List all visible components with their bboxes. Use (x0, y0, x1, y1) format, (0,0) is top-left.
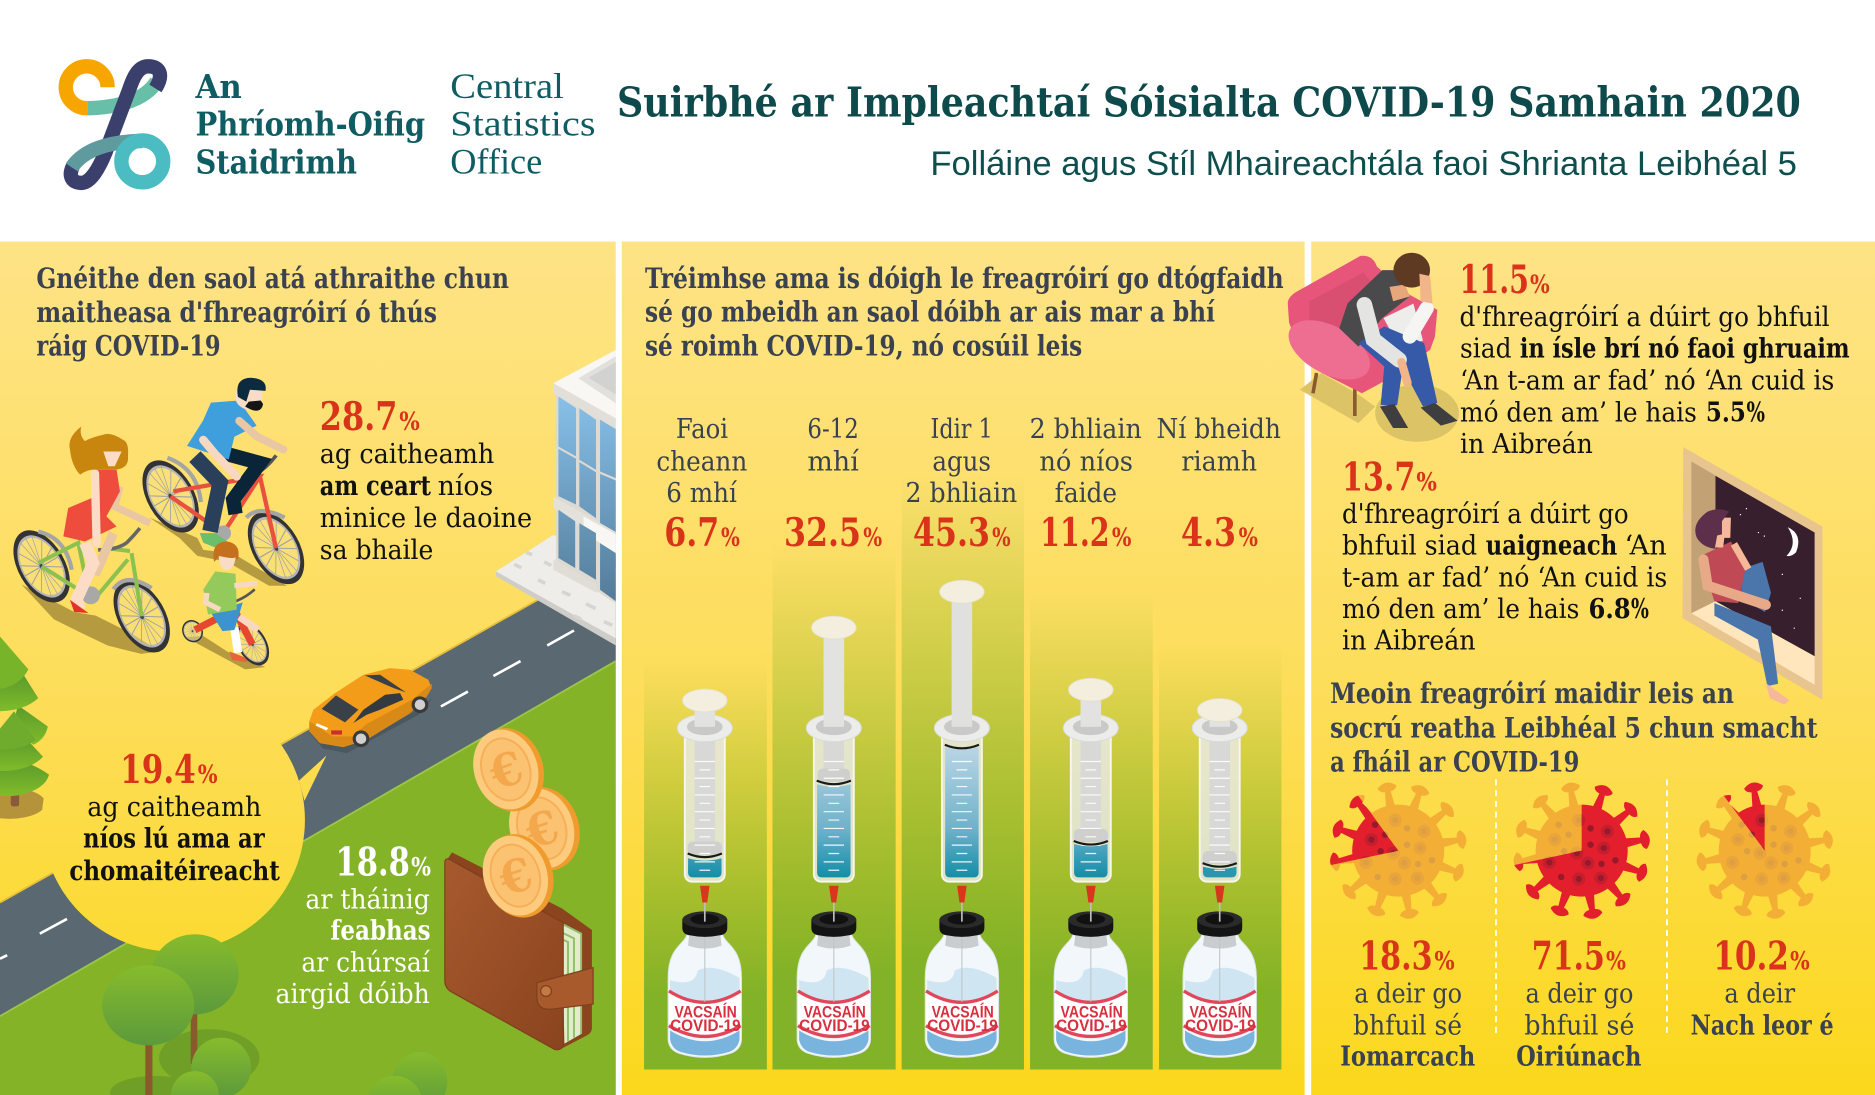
panel heading: aspects of life changed: Gnéithe den saol atá athraithe chun (36, 262, 509, 295)
column: 6-12 months: 6-12 (807, 413, 859, 445)
stat: low or depressed (1459, 257, 1850, 460)
panel: wellbeing (1279, 241, 1875, 1095)
virus pie: 71.5% appropriate: % (1606, 945, 1626, 975)
stat: spending time outdoors: níos (438, 470, 493, 502)
column: never: riamh (1181, 445, 1257, 477)
syringe and vial: 32.5%: COVID-19 (799, 1016, 870, 1035)
column: 2 years or more: % (1112, 522, 1132, 552)
stat: improved finances: ar chúrsaí (301, 946, 430, 978)
illustration: wallet and coins (445, 719, 593, 1050)
illustration: car (309, 668, 433, 753)
coin: front (482, 834, 554, 918)
virus pie: 18.3% too much (1329, 781, 1475, 1073)
column: 6-12 months: % (863, 522, 882, 552)
stat: spending time outdoors: ag caitheamh (320, 438, 494, 470)
stat: improved finances: airgid dóibh (276, 978, 430, 1010)
stat: spending time outdoors: sa bhaile (320, 534, 433, 566)
virus pie: 18.3% too much: 18.3 (1359, 933, 1433, 979)
stat: lonely: 6.8 (1588, 593, 1631, 625)
callout: less time commuting: % (198, 759, 218, 789)
logo mark (66, 66, 163, 183)
logo wordmark English: Statistics (450, 104, 596, 144)
subtitle: Folláine agus Stíl Mhaireachtála faoi Shrianta Leibhéal 5 (930, 145, 1797, 183)
column: 1 to 2 years (905, 413, 1017, 556)
logo wordmark Irish: Staidrimh (196, 143, 357, 181)
column: 1 to 2 years: agus (932, 445, 991, 477)
logo wordmark English: Central (450, 66, 564, 106)
stat: lonely: d'fhreagróirí a dúirt go (1342, 498, 1629, 530)
callout: less time commuting: ag caitheamh (87, 791, 261, 823)
syringe and vial: 32.5% (797, 616, 871, 1057)
callout: less time commuting: 19.4 (120, 747, 196, 793)
illustration: woman at window (1682, 447, 1822, 705)
column: under 6 months: cheann (656, 445, 747, 477)
logo wordmark English: Office (450, 141, 542, 181)
stat: low or depressed: % (1530, 269, 1550, 299)
coin: middle: € (518, 798, 566, 860)
column: 1 to 2 years: Idir 1 (931, 413, 993, 445)
column: 1 to 2 years: 45.3 (913, 510, 990, 556)
column: 1 to 2 years: % (992, 522, 1011, 552)
stat: low or depressed: siad (1460, 332, 1511, 364)
virus pie: 10.2% not enough (1691, 781, 1834, 1042)
column: 1 to 2 years: 2 bhliain (905, 477, 1017, 509)
heading: attitude to Level 5: Meoin freagróirí maidir leis an (1330, 677, 1734, 710)
virus pie: 18.3% too much: Iomarcach (1340, 1041, 1475, 1073)
coin: top: € (482, 740, 530, 801)
syringe and vial: 45.3% (925, 580, 999, 1057)
column: under 6 months: Faoi (676, 413, 728, 445)
stat: lonely (1342, 454, 1667, 657)
stat: spending time outdoors: minice le daoine (320, 502, 532, 534)
column: 2 years or more: 2 bhliain (1030, 413, 1142, 445)
illustration: round trees (102, 934, 447, 1095)
callout: less time commuting: níos lú ama ar (83, 823, 265, 855)
virus pie: 10.2% not enough: % (1790, 945, 1810, 975)
column: never: Ní bheidh (1157, 413, 1281, 445)
column: under 6 months: 6.7 (664, 510, 719, 556)
heading: attitude to Level 5: a fháil ar COVID-19 (1330, 745, 1579, 778)
column: 2 years or more: nó níos (1039, 445, 1133, 477)
stat: improved finances: ar tháinig (305, 884, 430, 916)
virus pie: 10.2% not enough: 10.2 (1713, 933, 1789, 979)
stat: lonely: mó den am’ le hais (1342, 593, 1579, 625)
syringe and vial: 4.3%: COVID-19 (1185, 1016, 1256, 1035)
header: logo (66, 66, 596, 183)
virus pie: 71.5% appropriate: a deir go (1525, 977, 1633, 1009)
syringe and vial: 45.3%: COVID-19 (927, 1016, 998, 1035)
panel heading: sé go mbeidh an saol dóibh ar ais mar a bhí (645, 296, 1215, 329)
panel heading (645, 262, 1284, 363)
panel heading: Tréimhse ama is dóigh le freagróirí go dtógfaidh (645, 262, 1284, 295)
syringe and vial: 11.2%: COVID-19 (1056, 1016, 1127, 1035)
column: 6-12 months: 32.5 (784, 510, 861, 556)
stat: low or depressed: mó den am’ le hais (1460, 397, 1697, 429)
bar strips (644, 475, 1281, 1070)
woman on bike (13, 426, 170, 652)
column: never: % (1239, 522, 1258, 552)
stat: lonely: bhfuil siad (1342, 530, 1477, 562)
stat: lonely: t-am ar fad’ nó ‘An cuid is (1342, 561, 1667, 593)
stat: spending time outdoors: am ceart (320, 470, 431, 502)
logo wordmark English (450, 66, 596, 181)
stat: low or depressed: in Aibreán (1460, 428, 1593, 460)
panel: changes for the better (0, 241, 616, 1095)
panel: time until life returns to normal (622, 241, 1305, 1095)
stat: lonely: in Aibreán (1342, 625, 1476, 657)
panel heading: aspects of life changed (36, 262, 509, 363)
column: 6-12 months: mhí (807, 445, 859, 477)
child on tricycle (182, 542, 270, 666)
stat: lonely: % (1416, 466, 1437, 496)
syringe and vial: 11.2% (1054, 678, 1128, 1057)
syringe and vial: 11.2%: VACSAÍN (1061, 1002, 1123, 1021)
virus pie: 71.5% appropriate: bhfuil sé (1524, 1010, 1634, 1042)
column: under 6 months: % (721, 522, 740, 552)
virus pie: 71.5% appropriate (1512, 781, 1651, 1073)
virus pie: 18.3% too much: % (1434, 945, 1455, 975)
stat: low or depressed: 11.5 (1459, 257, 1529, 303)
column: never (1157, 413, 1281, 556)
virus pie: 10.2% not enough: Nach leor é (1691, 1010, 1834, 1042)
illustration: man in armchair (1279, 253, 1459, 442)
stat: low or depressed: % (1746, 397, 1765, 429)
syringe and vial: 4.3% (1183, 699, 1256, 1057)
illustration: building (496, 350, 616, 646)
stat: spending time outdoors (320, 394, 532, 566)
stat: low or depressed: 5.5 (1706, 397, 1746, 429)
stat: lonely: uaigneach (1486, 530, 1617, 562)
illustration: grass (0, 661, 616, 1095)
column: 2 years or more: 11.2 (1040, 510, 1110, 556)
stat: spending time outdoors: 28.7 (320, 394, 397, 440)
column: 2 years or more (1030, 413, 1142, 556)
syringe and vial: 6.7% (668, 689, 742, 1057)
coin: front: € (492, 846, 539, 907)
logo wordmark Irish: An (195, 68, 242, 106)
stat: low or depressed: ‘An t-am ar fad’ nó ‘An cuid is (1460, 365, 1834, 397)
virus pie: 18.3% too much: bhfuil sé (1353, 1010, 1462, 1042)
column: 2 years or more: faide (1055, 477, 1117, 509)
column: under 6 months: 6 mhí (666, 477, 737, 509)
stat: improved finances: 18.8 (336, 840, 410, 886)
panel heading: aspects of life changed: maitheasa d'fhreagróirí ó thús (36, 296, 437, 329)
panel heading: sé roimh COVID-19, nó cosúil leis (645, 330, 1082, 363)
syringe and vial: 32.5%: VACSAÍN (804, 1002, 866, 1021)
logo wordmark Irish (195, 68, 425, 181)
illustration: road (0, 556, 616, 1016)
stat: improved finances: feabhas (331, 915, 431, 947)
callout: less time commuting (42, 744, 326, 951)
stat: lonely: 13.7 (1342, 454, 1415, 500)
illustration: conifer tree (0, 634, 49, 819)
syringe and vial: 45.3%: VACSAÍN (932, 1002, 994, 1021)
syringe and vial: 6.7%: VACSAÍN (675, 1002, 737, 1021)
coin: middle (509, 787, 580, 870)
virus pie: 71.5% appropriate: Oiriúnach (1516, 1041, 1641, 1073)
column: never: 4.3 (1181, 510, 1236, 556)
virus pie: 18.3% too much: a deir go (1354, 977, 1462, 1009)
syringe and vial: 4.3%: VACSAÍN (1189, 1002, 1252, 1021)
callout: less time commuting: chomaitéireacht (69, 855, 280, 887)
stat: low or depressed: d'fhreagróirí a dúirt go bhfuil (1459, 301, 1830, 333)
illustration: family on bicycles (5, 378, 313, 669)
column: 6-12 months (784, 413, 882, 556)
column: under 6 months (656, 413, 747, 556)
logo wordmark Irish: Phríomh-Oifig (196, 106, 425, 144)
stat: lonely: ‘An (1624, 530, 1667, 562)
stat: improved finances (276, 840, 431, 1010)
virus pie: 10.2% not enough: a deir (1724, 977, 1796, 1009)
stat: improved finances: % (411, 852, 431, 882)
stat: spending time outdoors: % (399, 406, 420, 436)
virus pie: 71.5% appropriate: 71.5 (1532, 933, 1605, 979)
heading: attitude to Level 5 (1330, 677, 1818, 778)
panel heading: aspects of life changed: ráig COVID-19 (36, 330, 221, 363)
coin: top (473, 728, 544, 812)
stat: lonely: % (1631, 593, 1649, 625)
man on bike (142, 378, 304, 584)
syringe and vial: 6.7%: COVID-19 (670, 1016, 741, 1035)
